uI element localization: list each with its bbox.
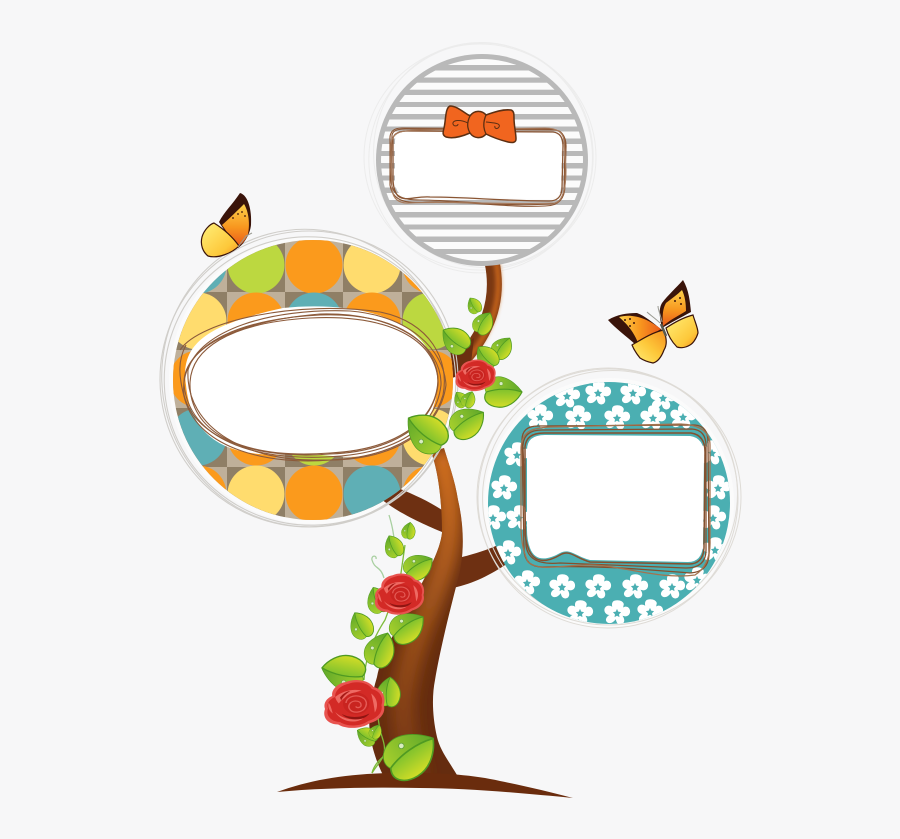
ground [277, 773, 573, 798]
white label box [395, 132, 562, 199]
icon: butterfly right [608, 280, 698, 363]
scribble frame [521, 424, 710, 576]
right branch [453, 545, 510, 588]
icon: butterfly left [201, 193, 252, 257]
vine: lower stems [364, 515, 405, 773]
panel: top striped circle [370, 54, 594, 266]
circle underlays and top sketch rings [169, 12, 734, 628]
scribble frame [390, 128, 566, 206]
icon: rose lower [324, 680, 385, 728]
trunk [369, 448, 463, 780]
tree: trunk, branches and ground [277, 262, 573, 798]
panel: right floral circle [476, 368, 742, 628]
scribble frame [180, 308, 446, 461]
dots [170, 236, 460, 522]
vine: upper leaves [397, 295, 522, 460]
tile checker [173, 240, 453, 520]
panel: left polka-dot circle [160, 228, 458, 528]
icon: orange bow [443, 106, 516, 143]
white label box [527, 435, 704, 562]
sketch rings [124, 196, 496, 566]
left branch [375, 488, 442, 532]
white label blob [185, 306, 437, 457]
flower pattern [480, 380, 731, 624]
icon: rose upper [455, 359, 496, 391]
vine: lower leaves [318, 521, 446, 787]
upper branch [450, 262, 498, 378]
sketch rings [441, 329, 779, 663]
icon: rose middle [375, 573, 424, 615]
